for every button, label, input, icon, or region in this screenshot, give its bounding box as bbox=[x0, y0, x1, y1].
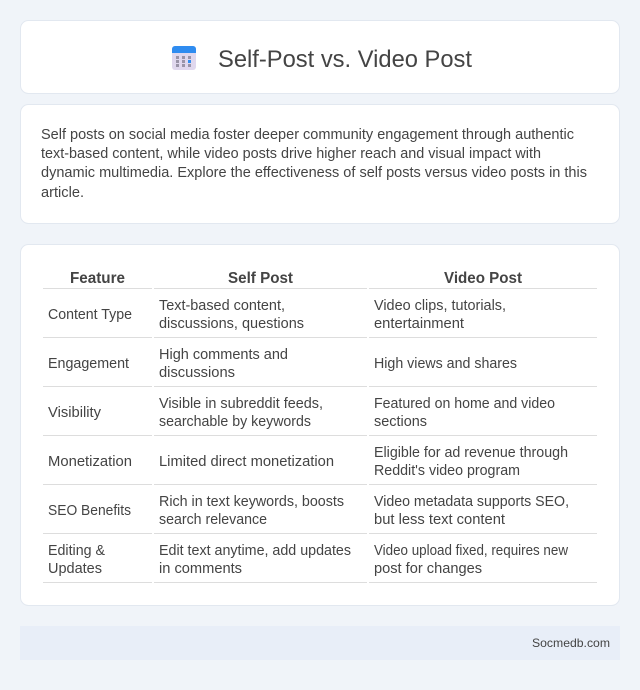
intro text: article. bbox=[41, 185, 84, 201]
row: seo benefits: Rich in text keywords, boosts bbox=[159, 494, 344, 510]
title: Self-Post vs. Video Post bbox=[218, 46, 472, 73]
table rules bbox=[43, 288, 597, 582]
row: monetization: Eligible for ad revenue through bbox=[374, 445, 568, 461]
row: engagement: Engagement bbox=[48, 356, 129, 372]
row: content type: Content Type bbox=[48, 307, 132, 323]
row: editing and updates: Updates bbox=[48, 561, 102, 577]
row: seo benefits: search relevance bbox=[159, 512, 267, 528]
row: visibility: Visibility bbox=[48, 405, 102, 421]
row: seo benefits: Video metadata supports SEO, bbox=[374, 494, 569, 510]
footer bar bbox=[20, 626, 620, 660]
row: seo benefits: SEO Benefits bbox=[48, 503, 131, 519]
intro text: text-based content, while video posts drive higher reach and visual impact with bbox=[41, 146, 541, 162]
row: monetization: Limited direct monetization bbox=[159, 454, 334, 470]
table header: Feature bbox=[70, 270, 125, 287]
table header: Self Post bbox=[228, 270, 293, 287]
row: content type: Text-based content, bbox=[159, 298, 285, 314]
row: engagement: High views and shares bbox=[374, 356, 517, 372]
row: visibility: Featured on home and video bbox=[374, 396, 555, 412]
row: content type: entertainment bbox=[374, 316, 464, 332]
intro text: dynamic multimedia. Explore the effectiveness of self posts versus video posts in this bbox=[41, 165, 587, 181]
row: monetization: Reddit's video program bbox=[374, 463, 520, 479]
panel: intro bbox=[20, 104, 620, 224]
row: seo benefits: but less text content bbox=[374, 512, 505, 528]
title panel bbox=[20, 20, 620, 94]
icon: calendar bbox=[172, 46, 196, 70]
row: content type: discussions, questions bbox=[159, 316, 304, 332]
intro text: Self posts on social media foster deeper community engagement through authentic bbox=[41, 127, 574, 143]
row: content type: Video clips, tutorials, bbox=[374, 298, 506, 314]
row: engagement bbox=[48, 347, 517, 381]
row: visibility bbox=[48, 396, 555, 430]
row: visibility: searchable by keywords bbox=[159, 414, 311, 430]
row: editing and updates: Editing & bbox=[48, 543, 105, 559]
panel: comparison table bbox=[20, 244, 620, 606]
row: monetization bbox=[48, 445, 568, 479]
row: editing and updates: post for changes bbox=[374, 561, 482, 577]
table header bbox=[70, 270, 522, 287]
row: editing and updates: in comments bbox=[159, 561, 242, 577]
intro text bbox=[41, 127, 587, 201]
table header: Video Post bbox=[444, 270, 522, 287]
row: editing and updates: Video upload fixed, requires new bbox=[374, 543, 569, 559]
footer credit: Socmedb.com bbox=[532, 636, 610, 650]
row: seo benefits bbox=[48, 494, 569, 528]
row: visibility: Visible in subreddit feeds, bbox=[159, 396, 323, 412]
row: editing and updates bbox=[48, 543, 569, 577]
row: engagement: High comments and bbox=[159, 347, 288, 363]
row: editing and updates: Edit text anytime, add updates bbox=[159, 543, 351, 559]
row: visibility: sections bbox=[374, 414, 427, 430]
row: content type bbox=[48, 298, 506, 332]
row: engagement: discussions bbox=[159, 365, 235, 381]
row: monetization: Monetization bbox=[48, 454, 132, 470]
